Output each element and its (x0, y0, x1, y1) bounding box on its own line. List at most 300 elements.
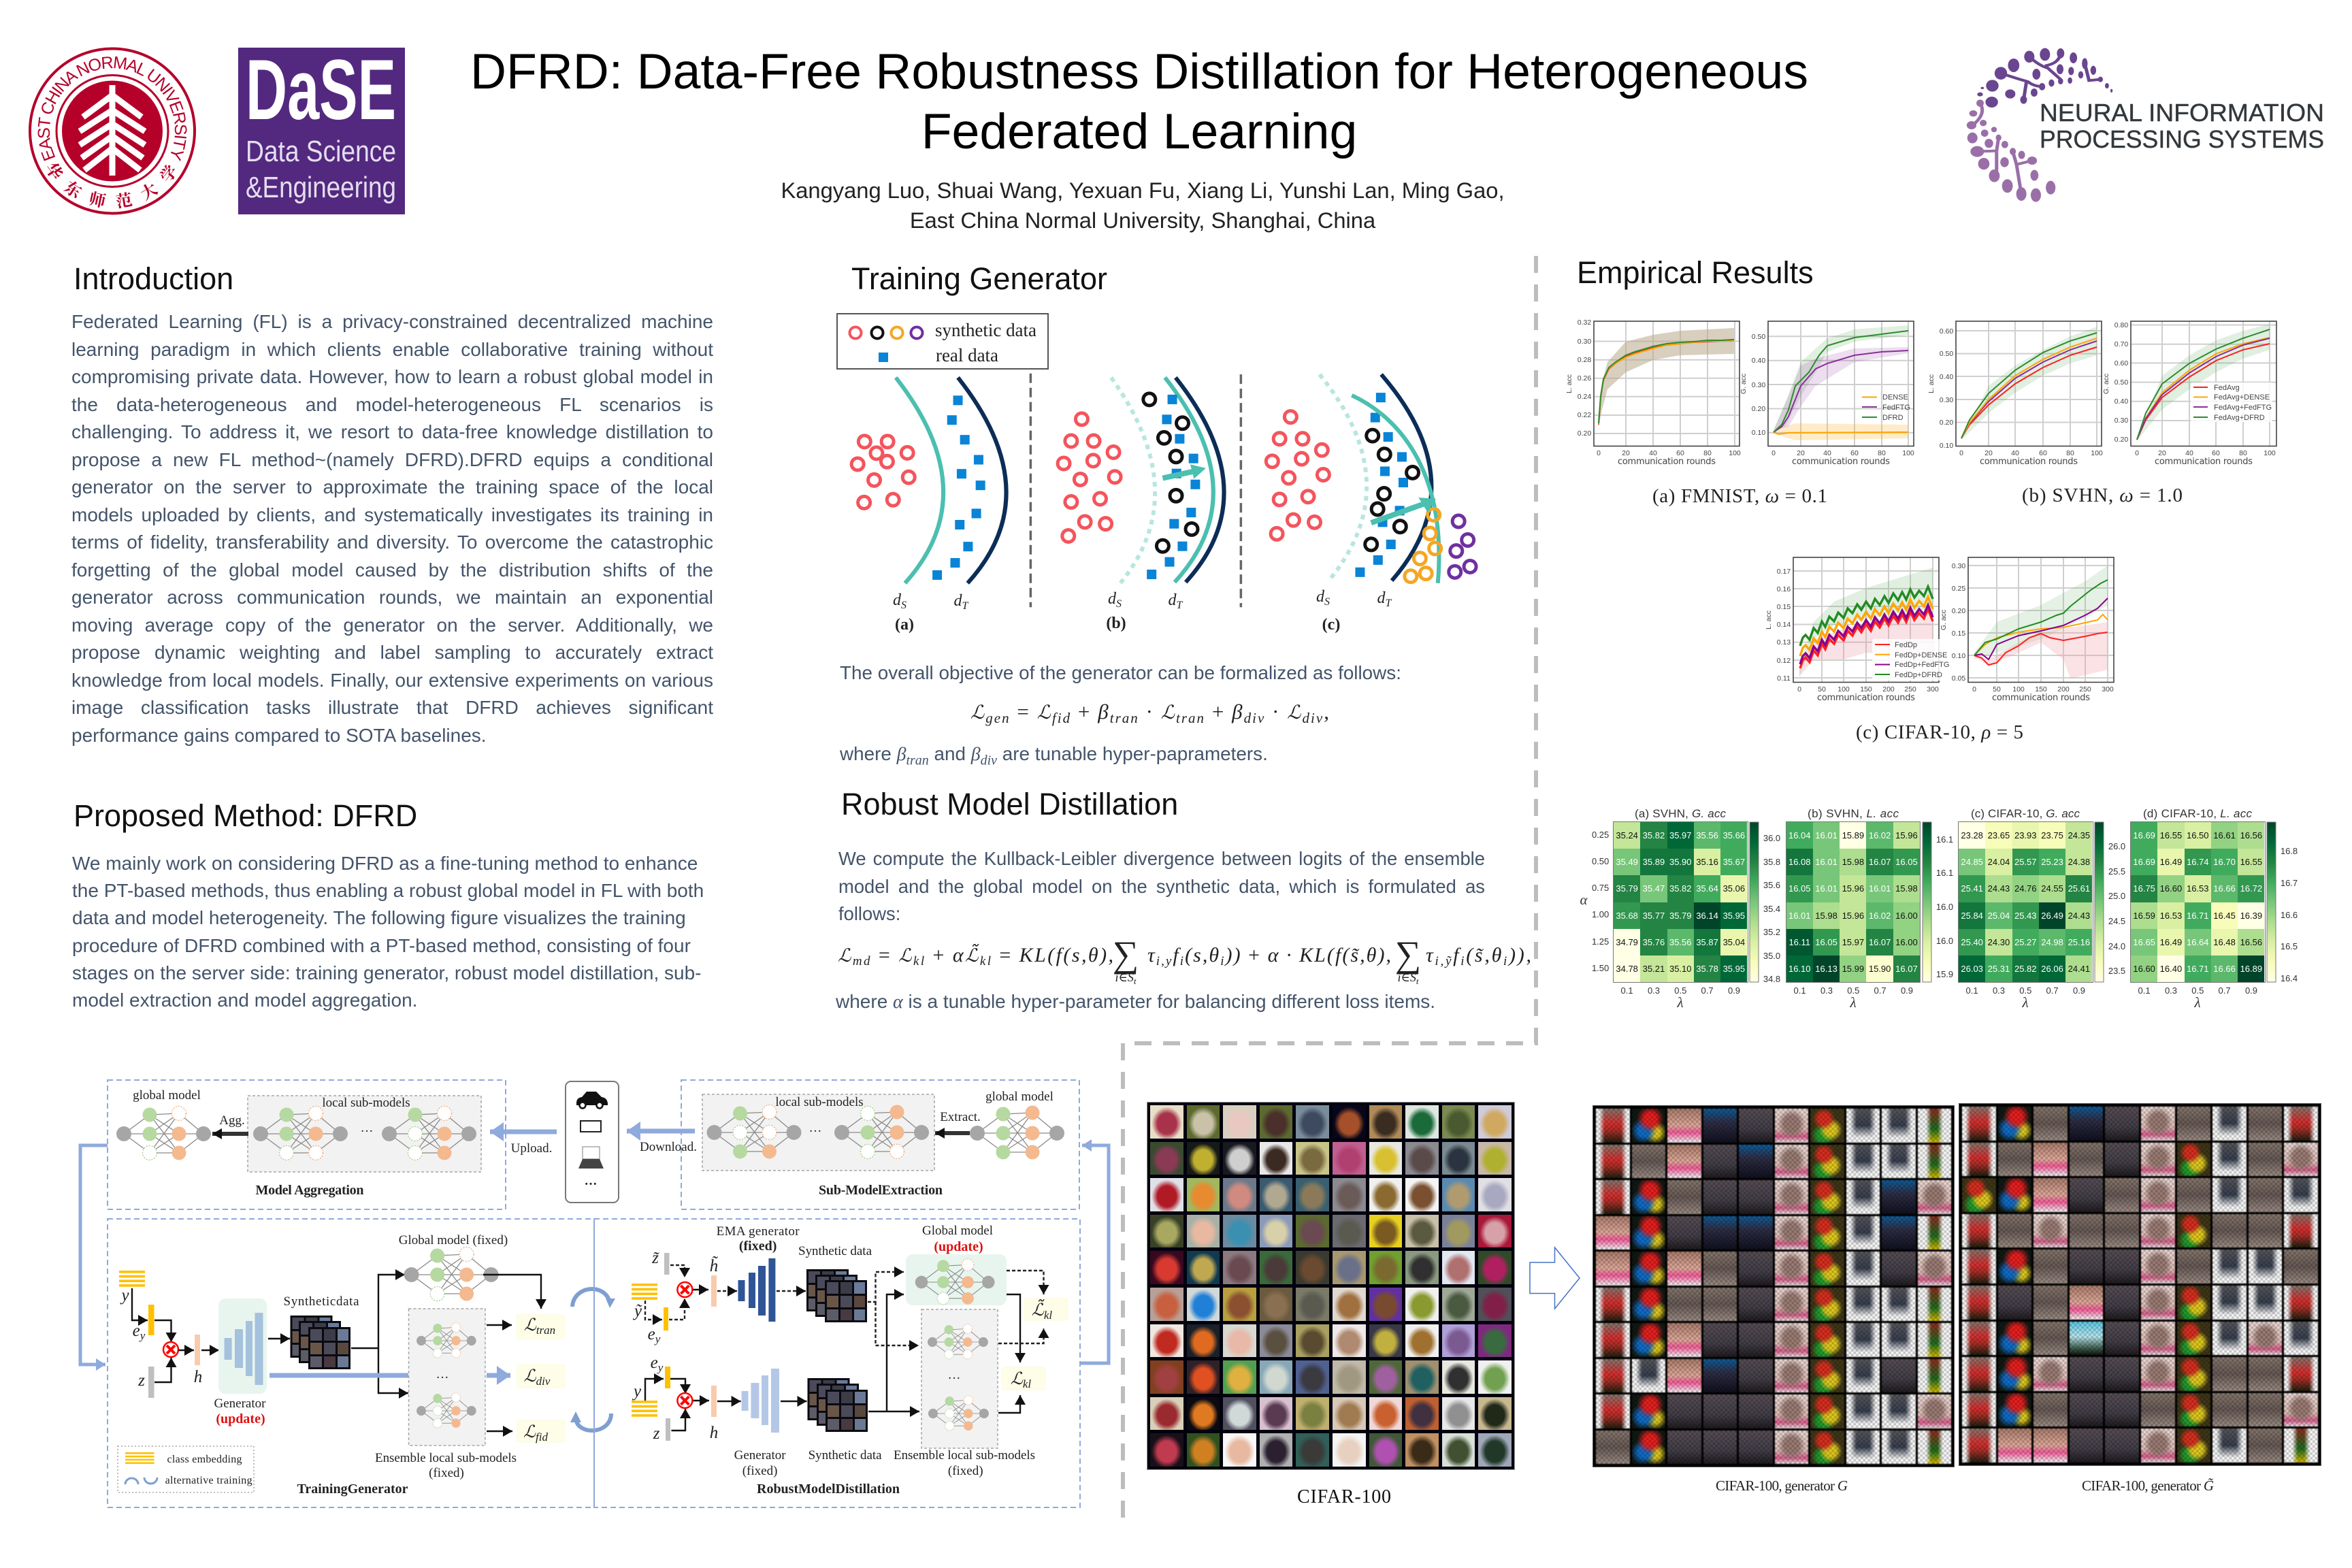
heatmap d: CIFAR-10 L.acc: 16.65 (2133, 937, 2155, 947)
panel: robust model distillation: h̃ (710, 1256, 718, 1275)
heatmap a: SVHN G.acc: 0.50 (1592, 856, 1609, 866)
heatmap a: SVHN G.acc: 36.0 (1763, 833, 1780, 843)
panel: robust model distillation: EMA generator (717, 1224, 800, 1239)
panel: training generator: TrainingGenerator (297, 1482, 408, 1497)
heatmap b: SVHN L.acc: 16.01 (1815, 830, 1838, 840)
text: introduction body: Federated Learning (FL) is a privacy-constrained decentralized machine (71, 311, 713, 332)
heatmap c: CIFAR-10 G.acc: 23.5 (2108, 966, 2125, 976)
chart: SVHN G.acc: 0.70 (2114, 340, 2128, 348)
chart: FMNIST G.acc: communication rounds (1792, 457, 1890, 467)
panel: training generator: ℒ (524, 1366, 537, 1386)
formula: robust model distillation loss: + (926, 944, 951, 966)
chart: CIFAR-10 L.acc: 200 (1882, 685, 1895, 693)
chart: CIFAR-10 G.acc: G. acc (1940, 610, 1948, 630)
chart: SVHN L.acc: 40 (2011, 449, 2019, 457)
panel: robust model distillation (594, 1219, 1080, 1507)
panel: robust model distillation: ỹ (632, 1302, 642, 1320)
arrow: upload (490, 1132, 557, 1156)
chart: SVHN G.acc: 40 (2185, 449, 2193, 457)
heatmap c: CIFAR-10 G.acc: 25.84 (1961, 911, 1983, 920)
heatmap d: CIFAR-10 L.acc: 16.66 (2213, 883, 2236, 894)
panel: robust model distillation: z (653, 1424, 660, 1443)
heatmap a: SVHN G.acc: 35.6 (1763, 880, 1780, 890)
formula: robust model distillation loss: f (1173, 944, 1181, 966)
panel: model aggregation: local sub-models (322, 1096, 410, 1110)
heatmap d: CIFAR-10 L.acc: 16.66 (2213, 964, 2236, 974)
heatmap d: CIFAR-10 L.acc: 16.53 (2187, 883, 2209, 894)
heatmap b: SVHN L.acc: 15.98 (1815, 911, 1838, 920)
chart: CIFAR-10 L.acc: FedDp (1895, 641, 1917, 649)
heatmap b: SVHN L.acc: 16.1 (1936, 834, 1953, 845)
heatmap b: SVHN L.acc: 15.96 (1842, 883, 1864, 894)
heatmap d: CIFAR-10 L.acc: 16.71 (2187, 911, 2209, 920)
logo: DaSE Data Science and Engineering: &Engineering (246, 171, 396, 204)
chart: SVHN G.acc: 0.20 (2114, 436, 2128, 444)
panel: robust model distillation: e (651, 1354, 658, 1372)
heatmap b: SVHN L.acc: 16.11 (1788, 937, 1810, 947)
text: distillation body: follows: (838, 903, 900, 924)
logo: DaSE Data Science and Engineering: DaSE (246, 43, 396, 137)
panel labels: d (954, 592, 962, 610)
chart: FMNIST G.acc: DFRD (1882, 414, 1904, 422)
panel: robust model distillation: (fixed) (739, 1239, 777, 1254)
title (470, 44, 1808, 159)
heatmap d: CIFAR-10 L.acc: 16.50 (2187, 830, 2209, 840)
heatmap a: SVHN G.acc: 0.9 (1728, 985, 1740, 996)
heatmap a: SVHN G.acc: α (1580, 892, 1588, 908)
chart: SVHN L.acc: 0 (1959, 449, 1963, 457)
heatmap c: CIFAR-10 G.acc: 24.30 (1988, 937, 2010, 947)
formula: robust model distillation loss: i (1503, 954, 1507, 968)
panel: model aggregation: Agg. (219, 1113, 245, 1128)
text: introduction body: generator across communication rounds, we maintain an exponential (71, 587, 713, 608)
heatmap b: SVHN L.acc: 0.9 (1901, 985, 1913, 996)
heatmap a: SVHN G.acc: 35.79 (1616, 883, 1638, 894)
formula: robust model distillation loss: (s,θ (1185, 944, 1219, 966)
chart: SVHN L.acc: communication rounds (1980, 457, 2078, 467)
logo: DaSE Data Science and Engineering (238, 43, 405, 214)
heatmap c: CIFAR-10 G.acc: 25.27 (2014, 937, 2037, 947)
chart: FMNIST L.acc: 0.32 (1578, 318, 1591, 327)
text: distillation hyper-parameter: where α is a tunable hyper-parameter for balancing different loss items. (836, 991, 1435, 1013)
caption: CIFAR-10: (c) CIFAR-10, ρ = 5 (1856, 721, 2023, 743)
heatmap a: SVHN G.acc: 1.25 (1592, 936, 1609, 947)
panel: training generator: z (137, 1371, 145, 1390)
caption: CIFAR-100: CIFAR-100 (1297, 1486, 1391, 1507)
panel labels: (b) (1106, 615, 1126, 632)
panel: robust model distillation: kl (1044, 1309, 1052, 1322)
panel: robust model distillation: h (710, 1424, 718, 1442)
heatmap b: SVHN L.acc: 15.99 (1842, 964, 1864, 974)
heatmap a: SVHN G.acc: 35.24 (1616, 830, 1638, 840)
panel labels: S (1116, 598, 1122, 610)
panel: robust model distillation: e (648, 1325, 655, 1343)
heatmap a: SVHN G.acc: 35.56 (1696, 830, 1718, 840)
formula: robust model distillation loss: ∑ (1113, 934, 1139, 975)
heatmap d: CIFAR-10 L.acc: 16.74 (2187, 857, 2209, 867)
heatmap b: SVHN L.acc: 16.02 (1869, 911, 1891, 920)
heatmap b: SVHN L.acc: 16.08 (1788, 857, 1811, 867)
chart: SVHN L.acc: 0.50 (1940, 350, 1953, 358)
heatmap b: SVHN L.acc: 16.01 (1815, 857, 1838, 867)
panel: model aggregation (108, 1080, 506, 1209)
panel: robust model distillation: Ensemble local sub-models (894, 1448, 1035, 1463)
formula: generator objective: tran (1176, 710, 1204, 726)
chart: CIFAR-10 L.acc: 50 (1818, 685, 1826, 693)
chart: CIFAR-10 L.acc: 150 (1860, 685, 1872, 693)
chart: FMNIST L.acc: 0.20 (1578, 429, 1591, 438)
panel: robust model distillation: ℒ (1011, 1369, 1024, 1388)
heatmap b: SVHN L.acc: 16.05 (1815, 937, 1838, 947)
chart: FMNIST L.acc: 0.24 (1578, 393, 1591, 401)
panel: training generator: div (536, 1375, 551, 1388)
chart: FMNIST G.acc: 0.40 (1752, 357, 1765, 365)
chart: CIFAR-10 G.acc: 200 (2057, 685, 2070, 693)
chart: CIFAR-10 L.acc: communication rounds (1817, 693, 1915, 703)
formula: generator objective: β (1098, 700, 1109, 723)
text: introduction body: the data-heterogeneous and model-heterogeneous FL scenarios is (71, 393, 713, 415)
image grid: generator G samples (1592, 1105, 1955, 1467)
formula: generator objective: ℒ (1161, 701, 1175, 723)
chart: CIFAR-10 L.acc: 100 (1838, 685, 1850, 693)
formula: robust model distillation loss: αℒ̃ (953, 944, 978, 966)
heading: Empirical Results: Empirical Results (1577, 255, 1814, 290)
text: introduction body: forgetting of the global model caused by the distribution shifts of the (71, 559, 713, 580)
heatmap a: SVHN G.acc: 35.2 (1763, 927, 1780, 937)
legend: synthetic and real data: real data (936, 345, 998, 365)
heatmap d: CIFAR-10 L.acc: 16.45 (2213, 911, 2236, 920)
heatmap d: CIFAR-10 L.acc: 16.7 (2281, 878, 2298, 888)
heatmap b: SVHN L.acc: 16.07 (1869, 857, 1891, 867)
caption: generator G tilde: CIFAR-100, generator G̃ (2082, 1477, 2214, 1494)
heatmap c: CIFAR-10 G.acc: 25.57 (2014, 857, 2037, 867)
text: proposed method body: stages on the server side: training generator, robust model distillation, sub- (72, 962, 702, 983)
formula: robust model distillation loss: kl (913, 954, 924, 968)
panel: robust model distillation: (update) (934, 1239, 983, 1254)
chart: CIFAR-10 L.acc: 0.17 (1777, 568, 1791, 576)
heatmap b: SVHN L.acc: 0.5 (1847, 985, 1859, 996)
chart: FMNIST G.acc: 20 (1797, 449, 1805, 457)
heatmap b: SVHN L.acc: 16.01 (1869, 883, 1891, 894)
chart: SVHN G.acc: 0.60 (2114, 359, 2128, 368)
formula: generator objective: + (1205, 700, 1230, 723)
formula: generator objective: β (1232, 700, 1243, 723)
title: DFRD: Data-Free Robustness Distillation for Heterogeneous (470, 44, 1808, 99)
panel labels: S (1324, 596, 1330, 608)
formula: robust model distillation loss: ∑ (1395, 934, 1421, 975)
panel: model aggregation: global model (133, 1088, 201, 1102)
chart: SVHN G.acc: FedAvg (2214, 384, 2240, 392)
heatmap a: SVHN G.acc: 35.78 (1696, 964, 1718, 974)
logo: East China Normal University seal: 华东师范大学 (48, 163, 175, 208)
formula: robust model distillation loss: i (1180, 954, 1183, 968)
chart: CIFAR-10 G.acc: 0.05 (1952, 674, 1965, 683)
chart: SVHN L.acc: 20 (1984, 449, 1993, 457)
heatmap b: SVHN L.acc: 16.01 (1815, 883, 1838, 894)
chart: FMNIST G.acc: G. acc (1740, 374, 1748, 394)
panel labels (893, 588, 1392, 634)
formula: robust model distillation loss: + α · KL(f(s̃,θ), (1248, 944, 1391, 966)
chart: SVHN L.acc: 100 (2091, 449, 2103, 457)
chart: SVHN G.acc: 0.80 (2114, 321, 2128, 329)
panel: training generator: y (139, 1329, 146, 1342)
chart: SVHN L.acc: 0.60 (1940, 327, 1953, 336)
heatmap b: SVHN L.acc: 0.1 (1793, 985, 1806, 996)
heatmap d: CIFAR-10 L.acc: 16.60 (2133, 964, 2155, 974)
heatmap a: SVHN G.acc: 35.04 (1723, 937, 1745, 947)
figure: training generator decision boundaries (837, 314, 1476, 634)
chart: FMNIST G.acc (1740, 321, 1914, 467)
chart: CIFAR-10 L.acc: 250 (1904, 685, 1916, 693)
chart: SVHN G.acc: 100 (2264, 449, 2276, 457)
formula: robust model distillation loss: ℒ (898, 945, 912, 966)
heatmap a: SVHN G.acc: λ (1676, 994, 1684, 1011)
chart: FMNIST G.acc: 60 (1850, 449, 1859, 457)
logo: NeurIPS: NEURAL INFORMATION (2040, 99, 2324, 127)
heatmap b: SVHN L.acc (1786, 807, 1953, 1011)
heatmap a: SVHN G.acc: 35.82 (1669, 883, 1692, 894)
heatmap b: SVHN L.acc: 0.3 (1820, 985, 1833, 996)
chart: CIFAR-10 L.acc: L. acc (1765, 610, 1773, 630)
chart: SVHN G.acc: 0.40 (2114, 397, 2128, 406)
heading: Robust Model Distillation: Robust Model Distillation (841, 787, 1178, 821)
panel: robust model distillation: (fixed) (948, 1464, 983, 1478)
heatmap b: SVHN L.acc: 16.01 (1788, 911, 1811, 920)
text: introduction body: challenging. To address it, we resort to data-free knowledge distillation to (71, 421, 713, 442)
panel: client devices: ··· (584, 1177, 598, 1192)
panel: training generator: ℒ (523, 1422, 536, 1441)
heatmap b: SVHN L.acc: 16.10 (1788, 964, 1811, 974)
heatmap a: SVHN G.acc: 35.68 (1616, 911, 1638, 920)
heatmap b: SVHN L.acc: 16.0 (1936, 902, 1953, 912)
text: proposed method body: model extraction and model aggregation. (72, 990, 417, 1011)
legend: synthetic and real data: synthetic data (935, 320, 1036, 340)
heatmap b: SVHN L.acc: 16.00 (1895, 937, 1918, 947)
workflow figure (80, 1080, 1109, 1507)
chart: SVHN G.acc: 80 (2239, 449, 2247, 457)
panel: training generator: Syntheticdata (283, 1294, 359, 1309)
chart: SVHN G.acc (2102, 321, 2276, 467)
chart: FMNIST L.acc: 20 (1622, 449, 1630, 457)
heatmap a: SVHN G.acc: 35.67 (1723, 857, 1745, 867)
panel: robust model distillation: RobustModelDistillation (757, 1482, 900, 1497)
heatmap b: SVHN L.acc: 16.04 (1788, 830, 1811, 840)
panel labels: d (1169, 591, 1177, 609)
panel: sub-model extraction (681, 1080, 1079, 1209)
heatmap d: CIFAR-10 L.acc: 16.60 (2160, 883, 2182, 894)
panel labels: d (1377, 589, 1386, 607)
heatmap c: CIFAR-10 G.acc: 23.65 (1988, 830, 2010, 840)
heatmap b: SVHN L.acc: 15.9 (1936, 969, 1953, 979)
heatmap a: SVHN G.acc: 35.10 (1669, 964, 1692, 974)
formula: generator objective: tran (1110, 710, 1138, 726)
legend: synthetic and real data (837, 314, 1048, 369)
chart: FMNIST G.acc: 100 (1902, 449, 1914, 457)
heatmap b: SVHN L.acc: 16.1 (1936, 868, 1953, 878)
chart: SVHN G.acc: FedAvg+FedFTG (2214, 404, 2272, 412)
heatmap c: CIFAR-10 G.acc (1958, 807, 2125, 1011)
heatmap d: CIFAR-10 L.acc: 16.75 (2133, 883, 2155, 894)
chart: CIFAR-10 L.acc: 300 (1927, 685, 1939, 693)
panel: robust model distillation: y (632, 1382, 642, 1401)
chart: FMNIST G.acc: 0 (1771, 449, 1776, 457)
heatmap b: SVHN L.acc: 15.97 (1842, 937, 1864, 947)
heatmap c: CIFAR-10 G.acc: 0.5 (2019, 985, 2031, 996)
heatmap c: CIFAR-10 G.acc: (c) CIFAR-10, G. acc (1971, 807, 2080, 820)
chart: CIFAR-10 G.acc: 0 (1972, 685, 1976, 693)
heatmap c: CIFAR-10 G.acc: 23.93 (2014, 830, 2037, 840)
text: proposed method body: the PT-based methods, thus enabling a robust global model in FL with both (72, 880, 704, 901)
heatmap a: SVHN G.acc: 0.7 (1701, 985, 1714, 996)
heatmap d: CIFAR-10 L.acc: 16.55 (2160, 830, 2182, 840)
formula: robust model distillation loss: kl (980, 954, 991, 968)
panel: robust model distillation: ··· (948, 1371, 960, 1386)
panel: sub-model extraction: Sub-ModelExtraction (819, 1183, 943, 1198)
heatmap c: CIFAR-10 G.acc: 24.55 (2041, 883, 2063, 894)
heatmap c: CIFAR-10 G.acc: 23.75 (2041, 830, 2063, 840)
arrow: download (627, 1131, 697, 1154)
panel: training generator: Global model (fixed) (399, 1233, 508, 1247)
heatmap d: CIFAR-10 L.acc: 16.5 (2281, 941, 2298, 951)
panel labels: T (1177, 600, 1183, 611)
heatmap d: CIFAR-10 L.acc: 16.6 (2281, 910, 2298, 920)
panel: model aggregation: Model Aggregation (256, 1183, 363, 1198)
panel: robust model distillation: Synthetic data (798, 1244, 872, 1258)
heatmap a: SVHN G.acc: 35.95 (1723, 911, 1745, 920)
heatmap b: SVHN L.acc: 16.07 (1895, 964, 1918, 974)
panel: training generator: y (119, 1286, 129, 1305)
heatmap b: SVHN L.acc: 16.05 (1788, 883, 1811, 894)
chart: FMNIST G.acc: 0.20 (1752, 405, 1765, 413)
heatmap b: SVHN L.acc: 15.96 (1842, 911, 1864, 920)
formula: robust model distillation loss: i (1460, 954, 1464, 968)
formula: generator objective: div (1302, 710, 1323, 726)
formula: robust model distillation loss: (s̃,θ (1466, 944, 1502, 966)
heatmap a: SVHN G.acc: 0.1 (1621, 985, 1633, 996)
heatmap a: SVHN G.acc: 35.4 (1763, 904, 1780, 914)
panel labels: T (962, 600, 969, 612)
panel: training generator: fid (536, 1431, 548, 1443)
heatmap a: SVHN G.acc: 35.87 (1696, 937, 1718, 947)
chart: CIFAR-10 G.acc: communication rounds (1992, 693, 2090, 703)
heatmap c: CIFAR-10 G.acc: 0.7 (2046, 985, 2059, 996)
formula: generator objective: · (1265, 700, 1286, 723)
panel: sub-model extraction: local sub-models (775, 1095, 864, 1109)
chart: SVHN G.acc: 60 (2212, 449, 2220, 457)
chart: SVHN G.acc: 0 (2135, 449, 2139, 457)
formula: generator objective: = (1011, 700, 1036, 723)
chart: CIFAR-10 L.acc: 0.12 (1777, 657, 1791, 665)
formula: generator objective: , (1324, 700, 1329, 723)
image grid: generator G tilde samples (1959, 1103, 2321, 1466)
heatmap a: SVHN G.acc: 1.50 (1592, 963, 1609, 973)
chart: SVHN G.acc: 0.30 (2114, 416, 2128, 425)
formula: robust model distillation loss: i∈S (1398, 970, 1416, 984)
heatmap d: CIFAR-10 L.acc: 16.64 (2187, 937, 2209, 947)
legend: class embedding and alternative training: alternative training (165, 1475, 252, 1486)
chart: SVHN L.acc: 0.10 (1940, 442, 1953, 450)
chart: CIFAR-10 G.acc: 100 (2012, 685, 2025, 693)
heatmap b: SVHN L.acc: 16.05 (1895, 857, 1918, 867)
formula: generator objective: ℒ (1287, 701, 1301, 723)
heatmap c: CIFAR-10 G.acc: 24.35 (2068, 830, 2090, 840)
heatmap c: CIFAR-10 G.acc: 24.76 (2014, 883, 2037, 894)
heatmap b: SVHN L.acc: 15.96 (1895, 830, 1918, 840)
heatmap c: CIFAR-10 G.acc: 25.61 (2068, 883, 2090, 894)
heatmap a: SVHN G.acc: 0.3 (1648, 985, 1660, 996)
text: introduction body: propose dynamic weighting and label sampling to accurately extract (71, 642, 713, 663)
authors and affiliation: East China Normal University, Shanghai, China (910, 208, 1375, 233)
text: proposed method body: We mainly work on considering DFRD as a fine-tuning method to enhance (72, 853, 698, 874)
heatmap c: CIFAR-10 G.acc: 23.28 (1961, 830, 1983, 840)
chart: FMNIST L.acc: L. acc (1565, 374, 1573, 393)
formula: robust model distillation loss: i,y (1156, 954, 1172, 968)
text: introduction body: moving average copy of the generator on the server. Additionally, we (71, 614, 713, 636)
formula: generator objective: ℒ (1037, 701, 1051, 723)
heatmap c: CIFAR-10 G.acc: 26.49 (2041, 911, 2063, 920)
heatmap d: CIFAR-10 L.acc: 16.49 (2160, 937, 2182, 947)
heading: Proposed Method: Proposed Method: DFRD (74, 798, 417, 833)
heatmap d: CIFAR-10 L.acc: 16.69 (2133, 830, 2155, 840)
heatmap c: CIFAR-10 G.acc: 24.5 (2108, 916, 2125, 926)
panel labels: (a) (895, 616, 914, 634)
chart: SVHN G.acc: communication rounds (2155, 457, 2253, 467)
heatmap a: SVHN G.acc: 35.49 (1616, 857, 1638, 867)
formula: robust model distillation loss: t (1134, 976, 1137, 986)
panel: sub-model extraction: global model (985, 1090, 1054, 1104)
heatmap d: CIFAR-10 L.acc: 16.70 (2213, 857, 2236, 867)
authors and affiliation (781, 178, 1505, 233)
arrow: aggregation to training loop (80, 1145, 108, 1365)
panel: robust model distillation: y (657, 1361, 664, 1374)
panel: training generator: h (194, 1368, 202, 1386)
panel: robust model distillation: Global model (922, 1224, 993, 1238)
heatmap d: CIFAR-10 L.acc: 0.1 (2138, 985, 2151, 996)
text: introduction body: terms of fidelity, transferability and diversity. To overcome the catastrophic (71, 532, 713, 553)
formula: robust model distillation loss: )) (1224, 944, 1247, 966)
heatmap b: SVHN L.acc: 15.90 (1869, 964, 1891, 974)
heatmap a: SVHN G.acc: 35.16 (1696, 857, 1718, 867)
arrow: CIFAR-100 to generated samples (1530, 1247, 1580, 1309)
heatmap b: SVHN L.acc: 16.02 (1869, 830, 1891, 840)
heatmap c: CIFAR-10 G.acc: 24.41 (2068, 964, 2090, 974)
chart: FMNIST L.acc: communication rounds (1618, 457, 1716, 467)
heatmap b: SVHN L.acc: (b) SVHN, L. acc (1808, 807, 1899, 820)
heatmap a: SVHN G.acc: 35.82 (1643, 830, 1665, 840)
heatmap a: SVHN G.acc: 0.25 (1592, 830, 1609, 840)
heatmap c: CIFAR-10 G.acc: 26.0 (2108, 841, 2125, 851)
chart: SVHN L.acc: 0.30 (1940, 396, 1953, 404)
text: distillation body: We compute the Kullback-Leibler divergence between logits of the ensemble (838, 848, 1485, 869)
chart: FMNIST L.acc: 0.30 (1578, 338, 1591, 346)
panel: sub-model extraction: ··· (809, 1124, 821, 1139)
chart: CIFAR-10 G.acc: 250 (2079, 685, 2091, 693)
chart: FMNIST G.acc: 0.30 (1752, 381, 1765, 389)
chart: CIFAR-10 G.acc: 300 (2102, 685, 2114, 693)
image grid: CIFAR-100 samples (1147, 1102, 1515, 1470)
arrow: download: Download. (640, 1140, 697, 1154)
heatmap c: CIFAR-10 G.acc: 25.0 (2108, 891, 2125, 901)
heatmap a: SVHN G.acc: 35.76 (1643, 937, 1665, 947)
formula: robust model distillation loss: f (1453, 944, 1461, 966)
heatmap a: SVHN G.acc: 35.97 (1669, 830, 1692, 840)
caption: generator G: CIFAR-100, generator G (1716, 1477, 1848, 1494)
chart: SVHN L.acc: 60 (2039, 449, 2047, 457)
text: distillation body (838, 848, 1485, 924)
heatmap c: CIFAR-10 G.acc: 24.0 (2108, 941, 2125, 951)
icon: alternating training arcs (570, 1289, 615, 1431)
chart: SVHN G.acc: G. acc (2102, 374, 2110, 394)
